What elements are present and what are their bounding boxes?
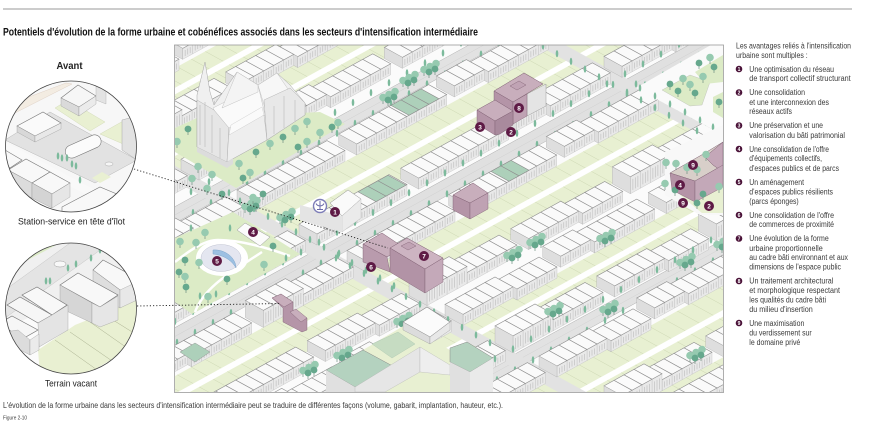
legend item 7: urbaine proportionnelle [749,244,823,253]
legend intro [736,42,851,60]
green-roof buildings and south block [180,307,493,392]
purple building: large block 7 [363,233,443,293]
legend: list of benefits [736,42,851,347]
map number badges: 1 [333,209,337,216]
map number badges: 2 [707,203,711,210]
dotted connector: station-service [134,169,388,248]
caption: L'évolution de la forme urbaine dans les secteurs d'intensification intermédiaire peut se traduire de différentes façons (volume, gabarit, implantation, hauteur, etc.). [3,401,503,410]
legend intro: urbaine sont multiples : [736,51,808,60]
legend item 6: de commerces de proximité [749,220,834,229]
map number badges: 5 [215,258,219,265]
purple building: north block [477,73,546,135]
legend item 3: valorisation du bâti patrimonial [749,131,845,140]
legend item 1: de transport collectif structurant [749,74,851,83]
legend item 9: le domaine privé [749,338,801,347]
legend item 2: et une interconnexion des [749,98,829,107]
white building at station [300,190,361,232]
legend item 1: 1 [738,67,741,73]
map number badges: 9 [691,162,695,169]
legend item 5 [736,178,833,206]
map number badges: 8 [517,105,521,112]
map number badges [212,103,714,272]
church park trees [173,118,342,204]
legend item 5: Un aménagement [749,178,805,187]
label: station-service: Station-service en tête d'îlot [18,216,125,228]
legend item 7: dimensions de l'espace public [749,262,841,272]
map number badges: 6 [369,264,373,271]
legend item 8: et morphologique respectant [749,286,841,295]
legend item 5: d'espaces publics résilients [749,188,833,196]
map number badges: 2 [509,129,513,136]
purple building: right edge [661,142,723,209]
legend item 2: Une consolidation [749,88,805,97]
inset: terrain vacant [5,243,137,375]
legend item 6: 6 [738,213,741,219]
legend item 4: Une consolidation de l'offre [749,145,829,154]
legend item 4: d'équipements collectifs, [749,154,822,163]
legend item 3 [736,121,845,140]
purple building: centre [453,183,488,219]
icon: metro station [314,200,326,212]
legend item 3: 3 [738,124,741,130]
inset: station-service [5,80,137,214]
legend item 1 [736,65,851,83]
legend item 4: 4 [738,147,741,153]
legend item 7 [736,234,848,272]
church [197,62,305,168]
legend item 9: 9 [738,321,741,327]
tree clusters along streets [241,60,733,379]
legend item 8: les qualités du cadre bâti [749,296,826,304]
purple building: small infill [272,294,307,332]
park with sponge basin [175,212,300,314]
map: streets, yards and rows of houses [175,45,723,392]
map: landmarks, parks and redeveloped buildings [173,38,733,392]
legend item 7: au cadre bâti environnant et aux [749,253,848,262]
legend item 6 [736,211,834,229]
label: terrain vacant: Terrain vacant [45,378,97,390]
legend item 9: du verdissement sur [749,328,812,338]
legend item 4 [736,145,839,173]
legend item 2 [736,88,829,116]
legend item 6: Une consolidation de l'offre [749,211,834,220]
title: Potentiels d'évolution de la forme urbaine et cobénéfices associés dans les secteurs d'intensification intermédiaire [3,26,478,38]
legend item 5: (parcs éponges) [749,197,799,206]
legend item 2: 2 [738,90,741,96]
lot around building at right [665,125,723,215]
map number badges: 9 [681,200,685,207]
legend item 9 [736,319,812,347]
legend item 8: Un traitement architectural [749,276,833,286]
map frame [174,45,724,392]
legend item 5: 5 [738,180,741,186]
legend item 8: 8 [738,279,741,285]
top rule [3,8,852,10]
map number badges: 3 [478,124,482,131]
legend item 3: Une préservation et une [749,121,823,130]
legend item 8: du milieu d'insertion [749,305,813,314]
park: church grounds [175,112,345,188]
top-right open space [636,45,723,130]
legend intro: Les avantages reliés à l'intensification [736,42,851,50]
heading: Avant: Avant [56,60,83,72]
legend item 7: Une évolution de la forme [749,234,829,243]
figure number: Figure 2-10 [3,416,27,422]
legend item 7: 7 [738,236,741,242]
legend item 2: réseaux actifs [749,107,792,116]
map number badges: 7 [422,253,426,260]
legend item 9: Une maximisation [749,319,804,328]
dotted connector: terrain vacant [137,304,280,306]
legend item 1: Une optimisation du réseau [749,65,834,74]
map number badges: 4 [251,229,255,236]
legend item 8 [736,276,841,314]
legend item 4: d'espaces publics et de parcs [749,164,839,173]
map number badges: 4 [678,182,682,189]
